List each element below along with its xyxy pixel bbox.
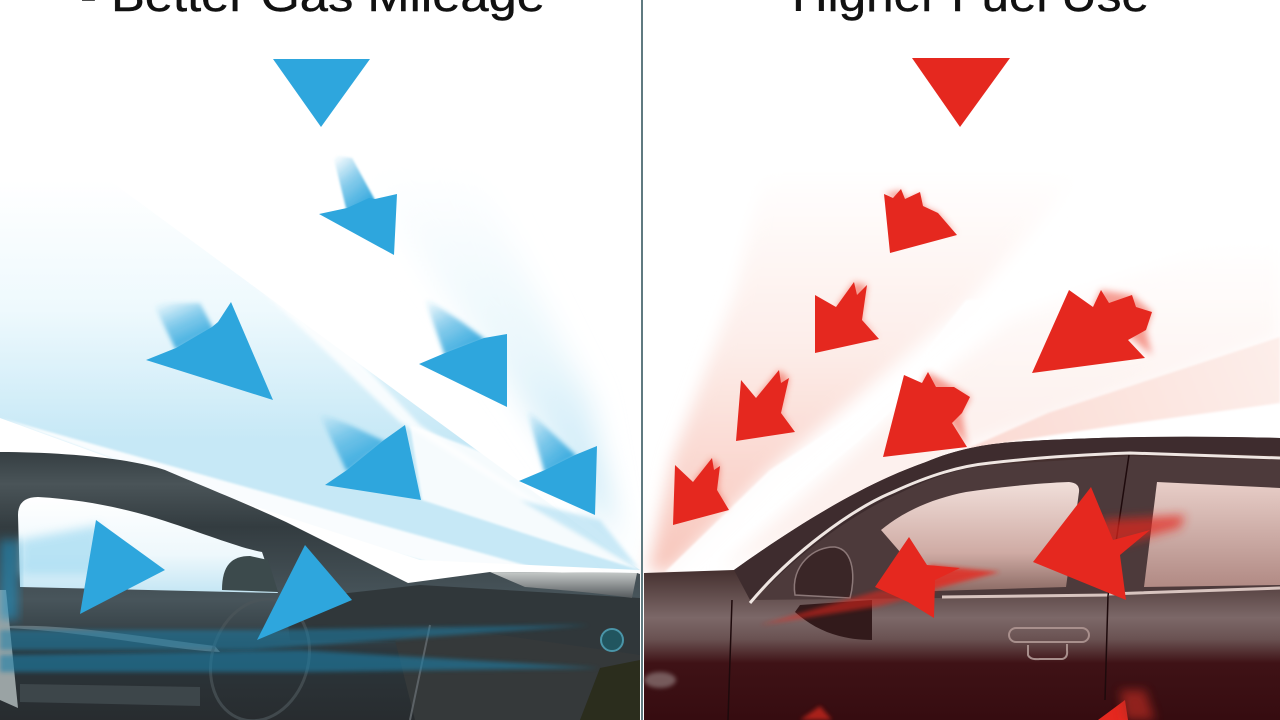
icon: arrow 2, blue with tail [319, 155, 397, 255]
icon: arrow 5, blue with tail [318, 412, 421, 500]
window opening [18, 497, 278, 593]
dashboard dark corner [580, 660, 640, 720]
dashboard vent [601, 629, 623, 651]
airflow streaks from the car [648, 170, 1280, 572]
body highlight [644, 672, 676, 688]
window airflow [20, 525, 100, 575]
center divider [641, 0, 643, 720]
airflow streaks converging on the car [0, 100, 640, 575]
dark red sedan side view [644, 437, 1280, 720]
front window [881, 482, 1079, 591]
icon: arrow 4, red with tail [1032, 290, 1152, 373]
dark upper dashboard [285, 585, 640, 655]
door seams [728, 455, 1129, 720]
icon: side arrow 1, red [760, 537, 1000, 625]
icon: arrow 3, red with tail [815, 282, 879, 353]
hood [490, 572, 637, 598]
panel: left, better gas mileage [0, 0, 640, 720]
roof dark band [734, 437, 1280, 600]
car body [0, 452, 640, 720]
dashboard panel [395, 625, 640, 720]
icon: arrow 4, blue with tail [419, 297, 507, 407]
beltline chrome [942, 588, 1280, 597]
steering wheel [195, 586, 325, 720]
icon: arrow top, red [912, 58, 1010, 127]
car interior seen from the side [0, 452, 640, 720]
chrome window trim [750, 453, 1280, 603]
icon: arrow 3, blue with tail [146, 302, 273, 400]
door sill [8, 626, 220, 652]
icon: arrow 6, blue with tail [519, 408, 597, 515]
door edge [0, 590, 18, 708]
icon: side arrow 2, red [1033, 487, 1185, 600]
rear window [1144, 482, 1280, 587]
door handle [1009, 628, 1089, 659]
icon: window arrow 1 [80, 520, 165, 614]
panel: right, higher fuel use [644, 0, 1280, 720]
side mirror [794, 547, 872, 640]
icon: arrow 5, red with tail [883, 372, 971, 457]
icon: arrow 2, red with tail [884, 189, 957, 253]
car body [644, 437, 1280, 720]
icon: arrow 7, red with tail [673, 458, 729, 525]
door glass surround [755, 456, 1280, 600]
icon: arrow top, blue [273, 59, 370, 127]
interior blue streaks [0, 625, 590, 650]
side mirror [222, 556, 278, 592]
icon: window arrow 2 [257, 545, 352, 640]
icon: arrow 6, red with tail [736, 370, 795, 441]
icon: small lower red arrows [800, 690, 1155, 720]
